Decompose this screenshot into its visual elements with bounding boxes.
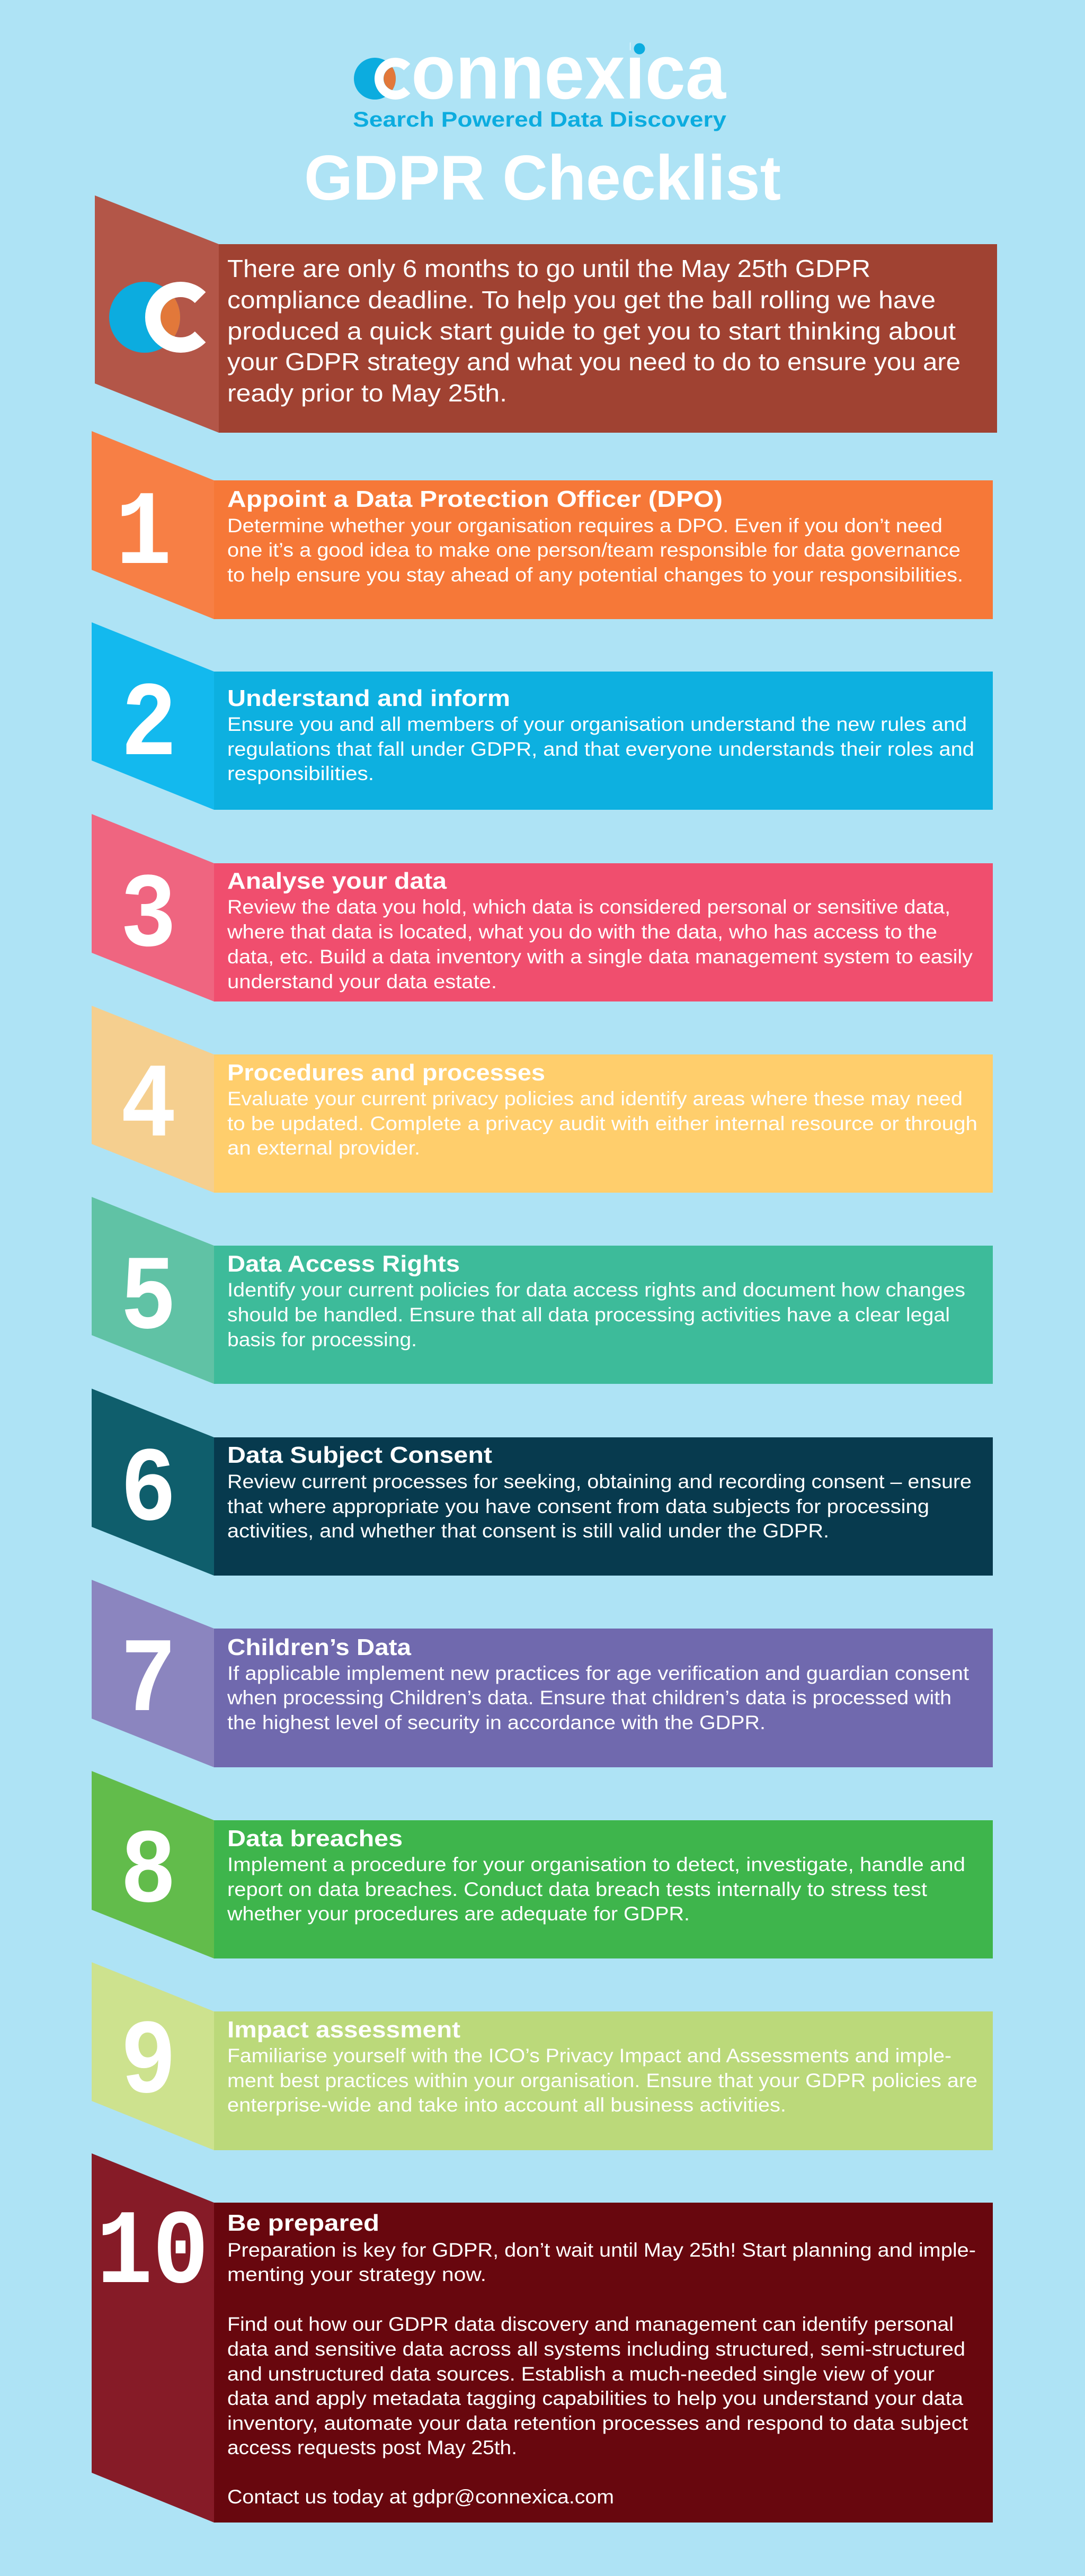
heading: Children’s Data: [227, 1634, 412, 1660]
heading: Procedures and processes: [227, 1060, 545, 1086]
heading: Appoint a Data Protection Officer (DPO): [227, 486, 723, 512]
body text: enterprise-wide and take into account all business activities.: [227, 2094, 786, 2116]
panel: step 4: [92, 1006, 993, 1193]
panel: step 7: [92, 1580, 993, 1767]
body text: [227, 2045, 977, 2116]
body text: Identify your current policies for data access rights and document how changes: [227, 1279, 965, 1301]
body text: data and sensitive data across all systems including structured, semi-structured: [227, 2338, 965, 2360]
heading: Data breaches: [227, 1826, 403, 1851]
body text: to be updated. Complete a privacy audit with either internal resource or through: [227, 1113, 977, 1134]
body text: [227, 1854, 965, 1925]
body text: inventory, automate your data retention processes and respond to data subject: [227, 2412, 968, 2434]
logo: connexica: connexica: [371, 29, 727, 115]
body text: data and apply metadata tagging capabilities to help you understand your data: [227, 2387, 963, 2409]
body text: If applicable implement new practices for age verification and guardian consent: [227, 1662, 970, 1684]
body text: whether your procedures are adequate for GDPR.: [227, 1903, 690, 1925]
panel: step 3: [92, 814, 993, 1001]
number 1: 1: [115, 475, 172, 595]
body text: understand your data estate.: [227, 971, 497, 992]
heading: Be prepared: [227, 2210, 379, 2236]
body text: to help ensure you stay ahead of any potential changes to your responsibilities.: [227, 564, 963, 586]
body text: [227, 1471, 972, 1542]
heading: Impact assessment: [227, 2017, 460, 2043]
body text: access requests post May 25th.: [227, 2437, 517, 2458]
body text: when processing Children’s data. Ensure that children’s data is processed with: [227, 1687, 951, 1709]
number 6: 6: [120, 1432, 176, 1552]
intro text: compliance deadline. To help you get the ball rolling we have: [227, 286, 936, 314]
panel: step 9: [92, 1962, 993, 2150]
panel: introduction: [95, 195, 997, 433]
heading: Data Subject Consent: [227, 1442, 492, 1468]
body text: [227, 896, 973, 992]
body text: data, etc. Build a data inventory with a single data management system to easily: [227, 946, 973, 968]
tagline: Search Powered Data Discovery: [353, 108, 727, 131]
body text: Find out how our GDPR data discovery and management can identify personal: [227, 2313, 954, 2335]
title: GDPR Checklist: [304, 142, 781, 213]
body text: Contact us today at gdpr@connexica.com: [227, 2486, 614, 2508]
number 9: 9: [120, 2004, 176, 2124]
body text: regulations that fall under GDPR, and that everyone understands their roles and: [227, 738, 974, 760]
intro text: produced a quick start guide to get you to start thinking about: [227, 317, 956, 345]
body text: Ensure you and all members of your organisation understand the new rules and: [227, 713, 967, 735]
panel: step 10: [92, 2153, 993, 2523]
intro text: ready prior to May 25th.: [227, 379, 507, 407]
number 7: 7: [120, 1622, 176, 1742]
panel: step 1: [92, 431, 993, 619]
number 10: 10: [96, 2194, 209, 2314]
body text: Familiarise yourself with the ICO’s Privacy Impact and Assessments and imple-: [227, 2045, 951, 2067]
number 3: 3: [120, 857, 176, 978]
body text: Review current processes for seeking, obtaining and recording consent – ensure: [227, 1471, 972, 1492]
icon: connexica C: [109, 282, 200, 353]
body text: one it’s a good idea to make one person/team responsible for data governance: [227, 539, 961, 561]
number 5: 5: [120, 1240, 176, 1360]
body text: should be handled. Ensure that all data processing activities have a clear legal: [227, 1304, 950, 1326]
body text: Implement a procedure for your organisation to detect, investigate, handle and: [227, 1854, 965, 1875]
body text: where that data is located, what you do with the data, who has access to the: [227, 921, 937, 943]
panel: step 2: [92, 622, 993, 810]
intro text: There are only 6 months to go until the May 25th GDPR: [227, 255, 870, 282]
body text: [227, 1279, 965, 1350]
body text: [227, 2239, 976, 2508]
body text: basis for processing.: [227, 1329, 417, 1350]
intro text: your GDPR strategy and what you need to do to ensure you are: [227, 348, 961, 375]
body text: [227, 1662, 970, 1733]
body text: Determine whether your organisation requires a DPO. Even if you don’t need: [227, 515, 942, 536]
body text: Preparation is key for GDPR, don’t wait until May 25th! Start planning and imple-: [227, 2239, 976, 2261]
body text: responsibilities.: [227, 763, 374, 784]
intro text: [227, 255, 961, 407]
body text: [227, 1088, 977, 1159]
heading: Understand and inform: [227, 685, 510, 711]
panel: step 5: [92, 1197, 993, 1384]
number 4: 4: [120, 1048, 176, 1168]
heading: Data Access Rights: [227, 1251, 460, 1277]
body text: menting your strategy now.: [227, 2264, 486, 2285]
body text: Evaluate your current privacy policies and identify areas where these may need: [227, 1088, 963, 1110]
body text: [227, 713, 974, 784]
body text: [227, 515, 963, 586]
number 8: 8: [120, 1813, 176, 1934]
heading: Analyse your data: [227, 868, 447, 894]
number 2: 2: [121, 666, 177, 786]
body text: an external provider.: [227, 1137, 420, 1159]
panel: step 6: [92, 1389, 993, 1576]
body text: report on data breaches. Conduct data breach tests internally to stress test: [227, 1879, 928, 1900]
panel: step 8: [92, 1771, 993, 1958]
body text: activities, and whether that consent is still valid under the GDPR.: [227, 1520, 829, 1542]
body text: and unstructured data sources. Establish a much-needed single view of your: [227, 2363, 935, 2385]
body text: Review the data you hold, which data is considered personal or sensitive data,: [227, 896, 950, 918]
body text: ment best practices within your organisation. Ensure that your GDPR policies are: [227, 2070, 977, 2091]
body text: the highest level of security in accordance with the GDPR.: [227, 1712, 766, 1733]
body text: that where appropriate you have consent from data subjects for processing: [227, 1496, 929, 1517]
